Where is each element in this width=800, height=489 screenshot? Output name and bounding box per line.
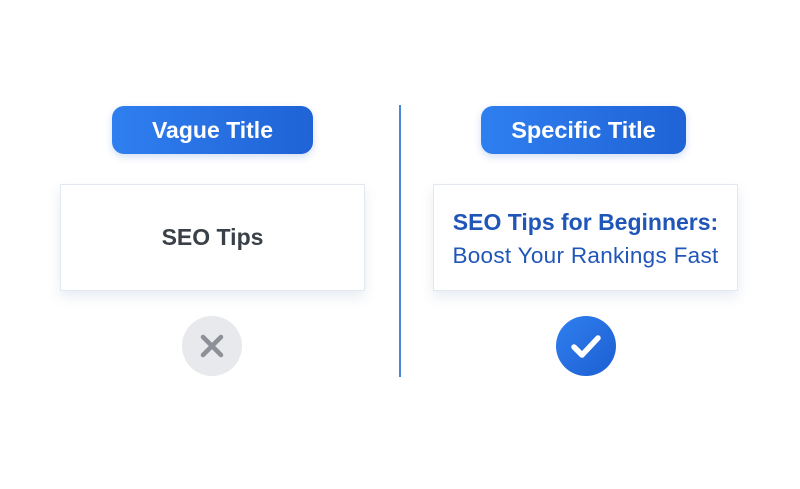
card: specific example [433,184,738,291]
icon: check [556,316,616,376]
label: specific title: Specific Title [511,116,656,142]
label: vague title [112,106,313,154]
card: specific example: SEO Tips for Beginners: [453,208,718,234]
card: vague example: SEO Tips [162,224,263,250]
divider [399,105,401,377]
label: specific title [481,106,686,154]
icon: cross [182,316,242,376]
label: vague title: Vague Title [152,116,273,142]
card: vague example [60,184,365,291]
card: specific example: Boost Your Rankings Fast [452,242,719,268]
